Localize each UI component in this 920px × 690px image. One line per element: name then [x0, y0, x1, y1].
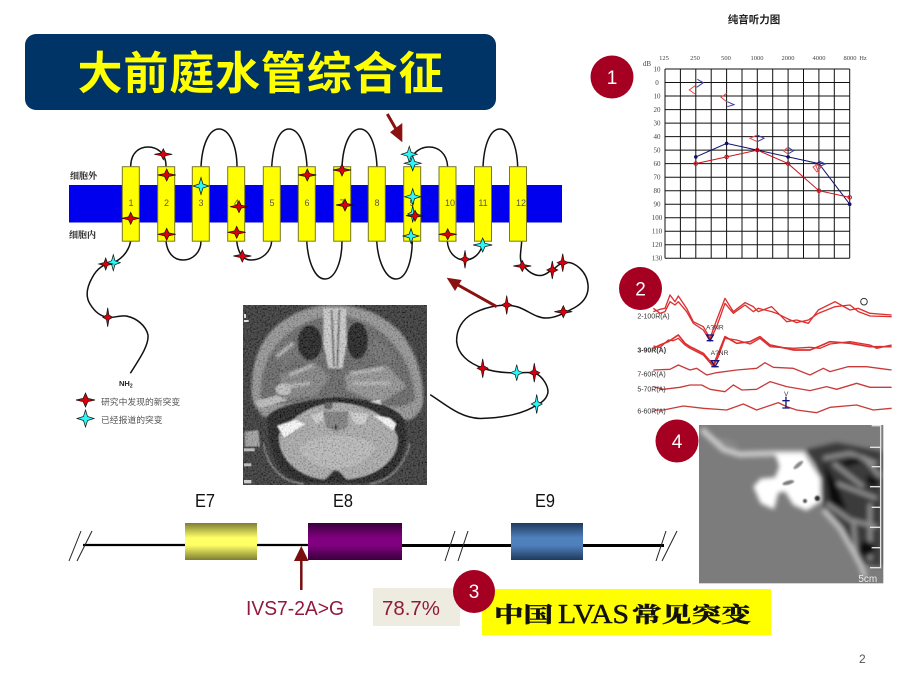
- trace 7-60R: [637, 363, 892, 379]
- mutation markers: [99, 146, 572, 414]
- trace 5-70R: 5-70R(A): [637, 386, 666, 393]
- decibel axis: 10: [654, 66, 661, 74]
- frequency axis: 250: [690, 55, 700, 62]
- trace 3-90R: 3-90R(A): [637, 348, 666, 355]
- cell membrane band: [69, 185, 562, 222]
- decibel axis: [643, 60, 663, 262]
- transmembrane segments: 11: [478, 198, 488, 208]
- trace 7-60R: 7-60R(A): [637, 372, 666, 379]
- decibel axis: 130: [652, 254, 663, 262]
- legend: 研究中发现的新突变: [101, 396, 180, 407]
- trace 2-100R: 2-100R(A): [637, 314, 670, 321]
- highlight box: 常见突变: [632, 599, 752, 629]
- highlight box: LVAS: [558, 599, 629, 629]
- transmembrane segments: 3: [198, 198, 204, 208]
- exon E9: [511, 523, 583, 560]
- frequency axis: 4000: [812, 55, 826, 62]
- wave peak markers: A?NR: [706, 324, 724, 331]
- page number: 2: [859, 652, 866, 666]
- decibel axis: 0: [655, 79, 659, 87]
- decibel axis: 100: [652, 214, 663, 222]
- frequency axis: 125: [659, 55, 669, 62]
- transmembrane segments: 10: [445, 198, 455, 208]
- trace 6-60R: [637, 403, 892, 416]
- label: extracellular: 细胞外: [70, 169, 98, 182]
- transmembrane segments: 1: [128, 198, 134, 208]
- bone conduction markers: [689, 79, 825, 173]
- frequency axis: 2000: [782, 55, 794, 62]
- transmembrane segments: 9: [409, 198, 415, 208]
- arrow: to C-terminal tail: [447, 278, 497, 307]
- badge 4: 4: [672, 432, 683, 453]
- exon E8: [308, 523, 402, 560]
- membrane topology diagram: [69, 129, 588, 427]
- legend: [76, 393, 180, 427]
- title banner: 大前庭水管综合征: [78, 48, 444, 99]
- frequency box: 78.7%: [382, 597, 440, 620]
- arrow: to segment 9: [387, 114, 402, 142]
- transmembrane segments: 2: [164, 198, 169, 208]
- badge 3: [453, 570, 495, 613]
- frequency box: [373, 588, 460, 626]
- badge 1: [590, 56, 634, 98]
- N-terminus label: NH: [119, 379, 130, 388]
- scale ruler: [870, 425, 881, 568]
- exon label E8: E8: [333, 491, 353, 511]
- trace 2-100R: [637, 295, 892, 341]
- decibel axis: 40: [654, 133, 661, 141]
- trace 5-70R: [637, 382, 892, 393]
- wave peak markers: A?NR: [711, 350, 729, 357]
- decibel axis: 20: [654, 106, 661, 114]
- exon label E7: E7: [195, 491, 215, 511]
- decibel axis: dB: [643, 60, 651, 68]
- decibel axis: 110: [652, 228, 663, 236]
- decibel axis: 10: [654, 92, 661, 100]
- transmembrane segments: 7: [339, 198, 345, 208]
- transmembrane segments: 12: [516, 198, 526, 208]
- trace 3-90R: [637, 335, 892, 367]
- audiogram title: 纯音听力图: [728, 13, 780, 26]
- decibel axis: 90: [654, 200, 661, 208]
- decibel axis: 120: [652, 241, 663, 249]
- trace 6-60R: 6-60R(A): [637, 409, 666, 416]
- N-terminus label: 2: [130, 384, 133, 390]
- air conduction right ear: [694, 148, 852, 199]
- decibel axis: 50: [654, 146, 661, 154]
- intron line right: [402, 544, 664, 547]
- CT scan: [699, 425, 883, 585]
- mutation arrow: [294, 546, 309, 590]
- exon E7: [185, 523, 257, 560]
- mutation label: IVS7-2A>G: [246, 597, 344, 620]
- highlight box: 中国: [494, 599, 553, 629]
- frequency axis: 500: [721, 55, 731, 62]
- chart grid: [665, 69, 850, 258]
- title banner: [25, 34, 496, 110]
- decibel axis: 60: [654, 160, 661, 168]
- frequency axis: Hz: [859, 55, 867, 62]
- label: intracellular: 细胞内: [69, 228, 96, 241]
- legend: 已经报道的突变: [101, 414, 163, 425]
- badge 1: 1: [607, 68, 617, 89]
- ABR waveforms: [637, 295, 892, 416]
- frequency axis: [659, 55, 867, 62]
- transmembrane segments: 6: [304, 198, 310, 208]
- badge 3: 3: [469, 582, 479, 603]
- badge 4: [656, 420, 698, 462]
- air conduction left ear: [694, 142, 852, 206]
- transmembrane segments: 4: [234, 198, 239, 208]
- badge 2: 2: [635, 280, 646, 300]
- protein loops: [87, 129, 588, 418]
- gene structure diagram: [69, 491, 677, 620]
- decibel axis: 30: [654, 120, 661, 128]
- highlight box: [482, 589, 771, 635]
- exon label E9: E9: [535, 491, 555, 511]
- transmembrane segments: 8: [374, 198, 380, 208]
- MRI scan: [243, 305, 427, 485]
- transmembrane segments: 5: [269, 198, 275, 208]
- decibel axis: 80: [654, 187, 661, 195]
- transmembrane segments: [122, 167, 527, 241]
- wave peak markers: V: [784, 391, 789, 398]
- frequency axis: 1000: [750, 55, 764, 62]
- wave peak markers: [706, 324, 790, 408]
- audiogram: [643, 13, 867, 262]
- scale label: 5cm: [858, 574, 877, 585]
- badge 2: [619, 267, 662, 310]
- frequency axis: 8000: [844, 55, 856, 62]
- intron line left: [83, 544, 308, 546]
- break marks: [69, 531, 677, 561]
- decibel axis: 70: [654, 174, 661, 182]
